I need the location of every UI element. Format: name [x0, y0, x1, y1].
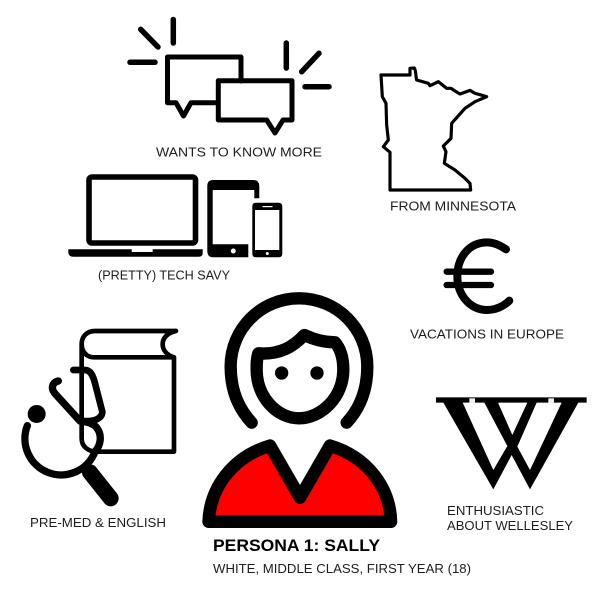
icon: book and stethoscope — [25, 331, 176, 498]
icon: persona figure — [209, 298, 391, 522]
label: pre-med and english: PRE-MED & ENGLISH — [30, 515, 166, 530]
icon: wellesley W — [436, 397, 587, 489]
icon: devices — [68, 177, 282, 257]
icon: laptop — [68, 177, 203, 257]
label: pretty tech savy: (PRETTY) TECH SAVY — [98, 268, 230, 282]
hair — [231, 298, 367, 423]
label: vacations in europe: VACATIONS IN EUROPE — [410, 326, 564, 342]
icon: speech bubbles — [130, 20, 329, 133]
icon: phone — [252, 203, 282, 257]
icon: minnesota outline — [381, 68, 487, 190]
face — [257, 335, 343, 418]
label: from minnesota: FROM MINNESOTA — [390, 198, 516, 214]
icon: tablet — [207, 180, 259, 257]
icon: book — [82, 331, 176, 452]
icon: euro sign — [447, 242, 509, 310]
icon: stethoscope — [25, 370, 111, 498]
heading: persona 1 sally: PERSONA 1: SALLY — [213, 536, 381, 555]
label: enthusiastic about wellesley — [447, 503, 573, 533]
subheading: demographics: WHITE, MIDDLE CLASS, FIRST YEAR (18) — [213, 561, 471, 576]
label: wants to know more: WANTS TO KNOW MORE — [156, 144, 322, 160]
label: enthusiastic about wellesley: ABOUT WELLESLEY — [447, 518, 573, 533]
body with red shirt — [209, 446, 391, 522]
label: enthusiastic about wellesley: ENTHUSIASTIC — [447, 503, 544, 518]
eyes — [275, 366, 324, 380]
